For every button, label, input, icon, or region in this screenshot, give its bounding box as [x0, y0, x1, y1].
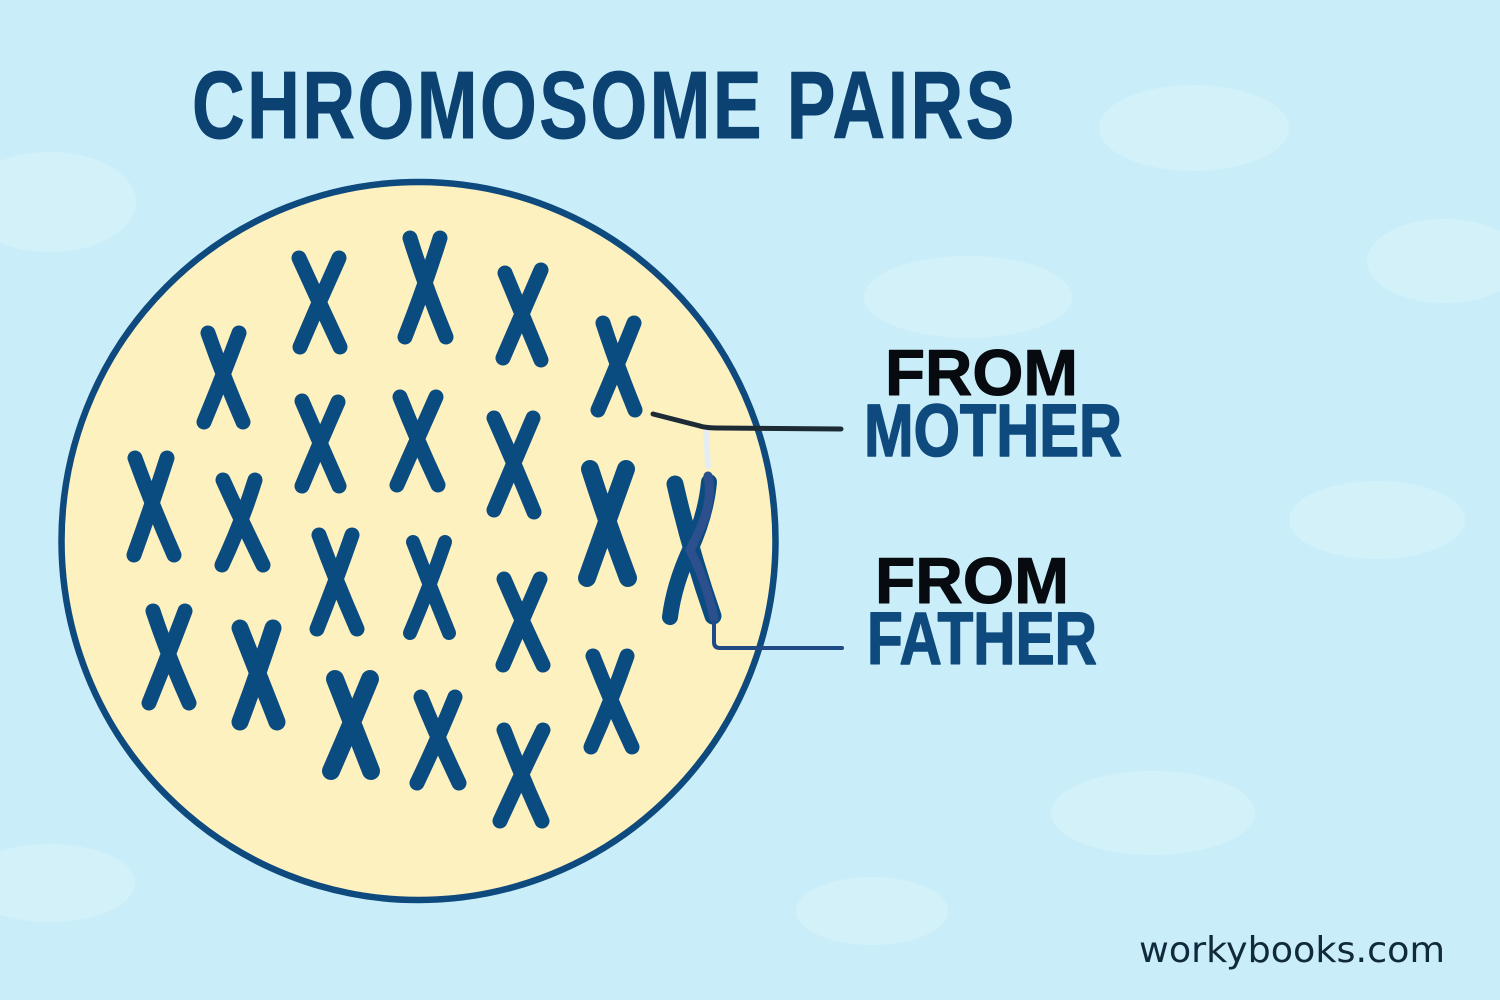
chromosome 21	[500, 730, 543, 821]
label: from mother	[864, 336, 1122, 472]
chromosome 10	[675, 484, 713, 616]
watermark: workybooks.com	[1139, 930, 1445, 971]
chromosome 2	[299, 258, 340, 347]
pointer line: from mother	[653, 414, 841, 466]
chromosome 17	[149, 611, 189, 703]
label: from father	[867, 544, 1097, 680]
chromosome 6	[302, 401, 339, 486]
chromosome 3	[405, 238, 446, 337]
chromosome 1	[204, 333, 243, 422]
label: from father: FROM	[875, 544, 1069, 617]
title: CHROMOSOME PAIRS	[192, 52, 1014, 159]
cell circle	[62, 182, 776, 900]
chromosome 14	[410, 542, 449, 633]
chromosome 9	[587, 469, 628, 578]
pointer line: from father	[714, 622, 842, 648]
chromosome 12	[222, 480, 263, 565]
chromosome 20	[417, 697, 459, 783]
chromosomes	[134, 238, 713, 821]
chromosome 19	[331, 679, 371, 771]
label: from father: FATHER	[867, 597, 1097, 680]
chromosome 13	[317, 535, 357, 629]
label: from mother: FROM	[885, 336, 1078, 409]
label: from mother: MOTHER	[864, 389, 1122, 472]
chromosome 16	[591, 656, 632, 747]
chromosome 4	[503, 270, 541, 360]
chromosome 8	[494, 418, 534, 512]
chromosome 5	[598, 323, 635, 410]
chromosome 11	[134, 458, 174, 555]
chromosome 15	[503, 579, 543, 665]
highlighted father arm	[690, 476, 714, 618]
chromosome 7	[397, 397, 438, 485]
chromosome 18	[240, 628, 277, 722]
